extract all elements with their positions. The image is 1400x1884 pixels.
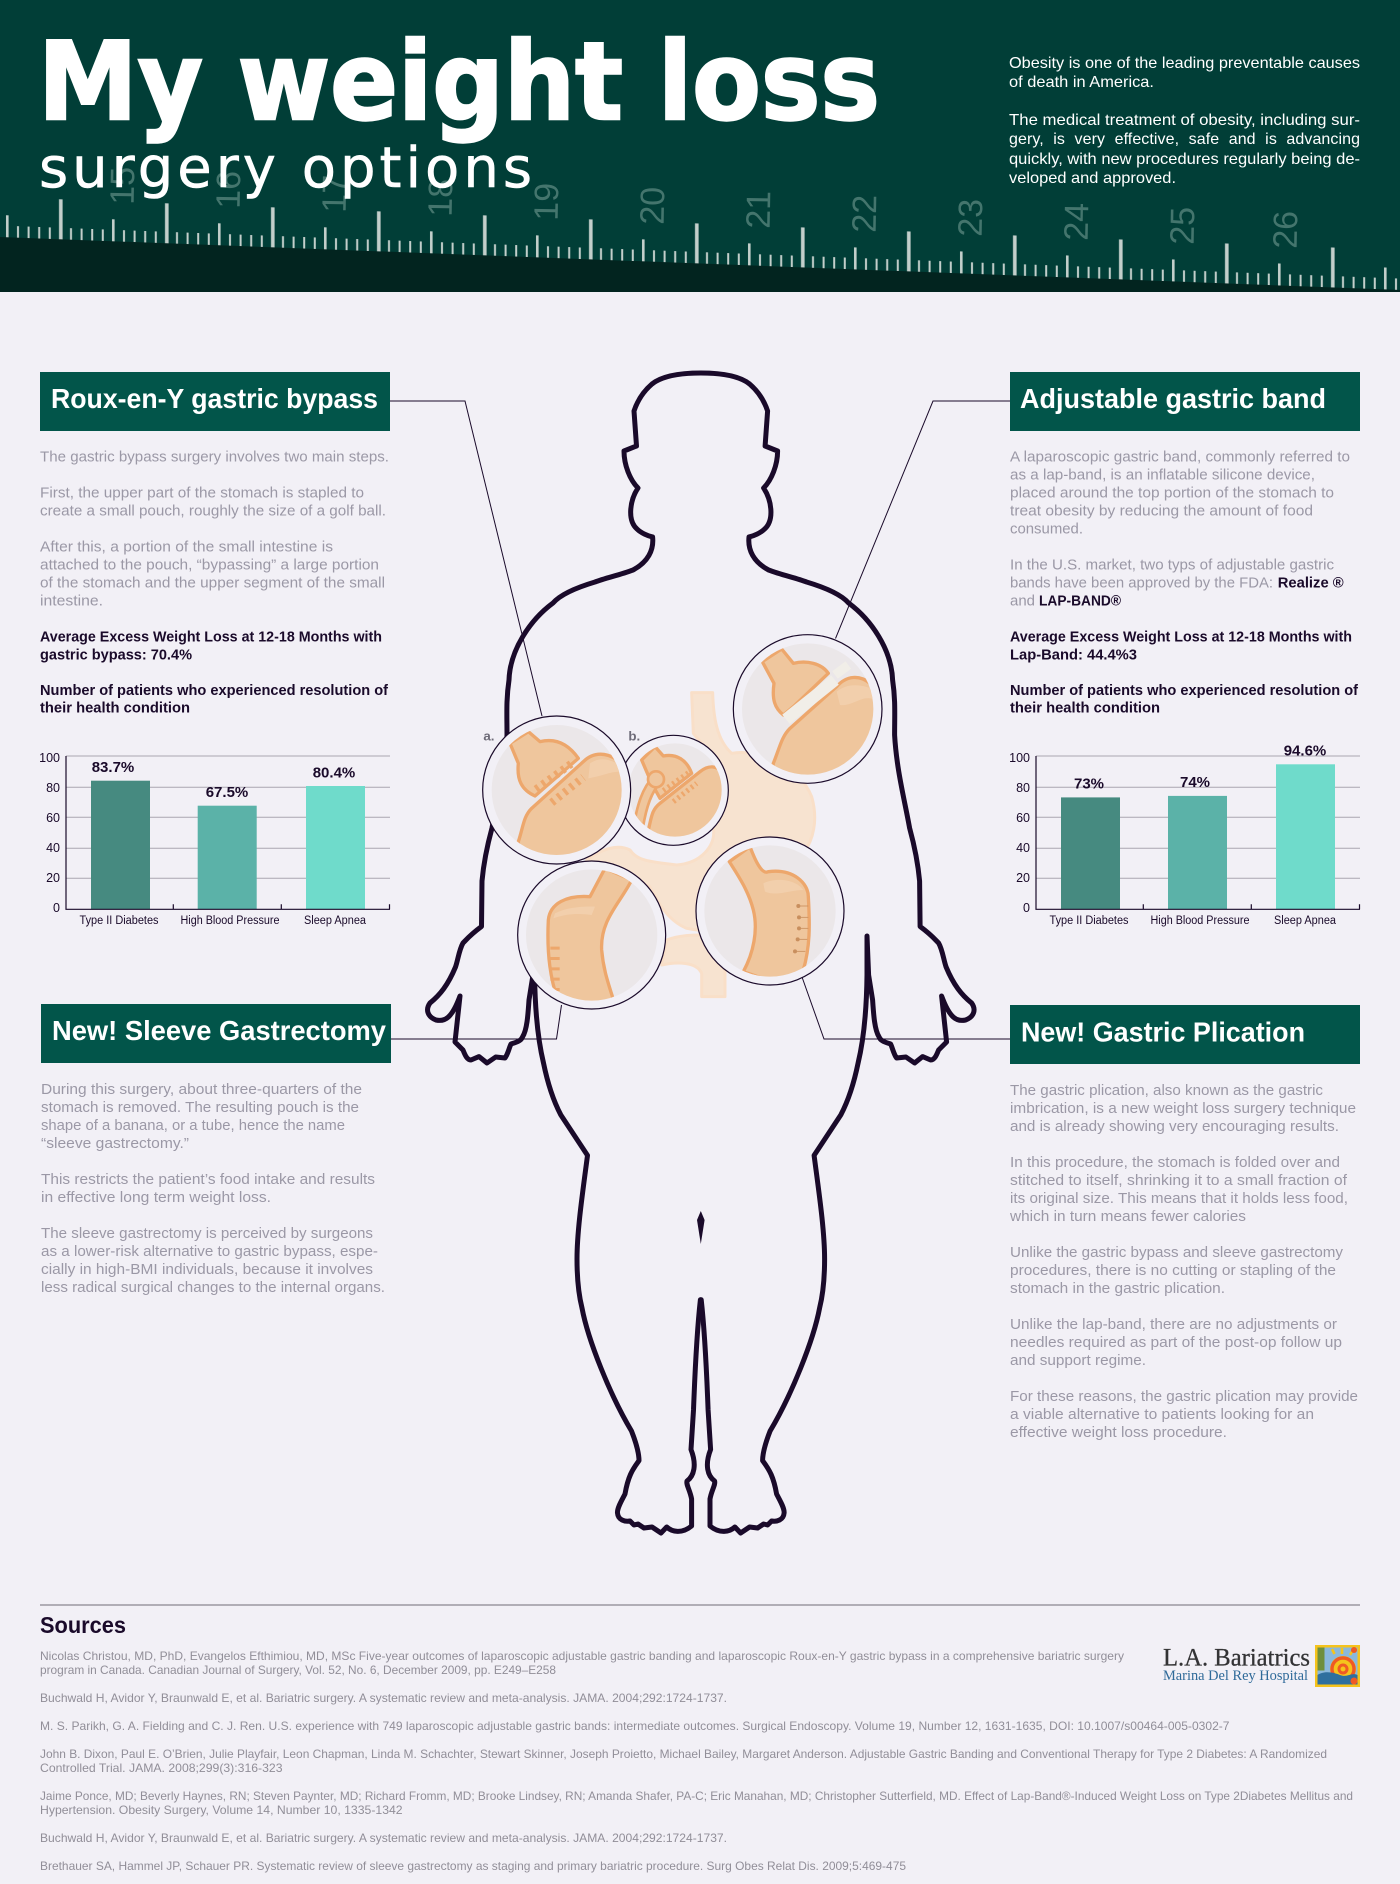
heading: plication xyxy=(1010,1005,1360,1064)
text: band stats: Average Excess Weight Loss at 12-18 Months with xyxy=(1010,629,1352,646)
text: bypass description: create a small pouch, roughly the size of a golf ball. xyxy=(40,503,386,520)
text: bypass stats: gastric bypass: 70.4% xyxy=(40,647,192,664)
text: plication description xyxy=(1009,1082,1358,1441)
bar chart: bypass: 80.4% xyxy=(313,765,355,782)
text: plication description: Unlike the gastric bypass and sleeve gastrectomy xyxy=(1010,1244,1344,1261)
text: band description: LAP-BAND® xyxy=(1039,593,1121,610)
ruler numbers: 17 xyxy=(316,175,354,213)
text: plication description: stomach in the gastric plication. xyxy=(1010,1280,1225,1297)
intro text: Obesity is one of the leading preventable causes xyxy=(1009,55,1360,72)
heading: band xyxy=(1010,372,1360,431)
background stomach xyxy=(587,693,815,997)
text: sleeve description: as a lower-risk alternative to gastric bypass, espe- xyxy=(41,1243,378,1260)
text: plication description: needles required as part of the post-op follow up xyxy=(1010,1334,1342,1351)
text: source list xyxy=(40,1649,1353,1873)
ruler numbers: 21 xyxy=(740,191,778,229)
text: plication description: a viable alternative to patients looking for an xyxy=(1010,1406,1314,1423)
text: band description xyxy=(1010,449,1350,610)
text: band description: as a lap-band, is an inflatable silicone device, xyxy=(1010,467,1315,484)
bar chart: bypass: Sleep Apnea xyxy=(304,915,367,927)
ruler numbers: 25 xyxy=(1164,207,1202,245)
text: plication description: imbrication, is a new weight loss surgery technique xyxy=(1010,1100,1356,1117)
text: source list: Buchwald H, Avidor Y, Braunwald E, et al. Bariatric surgery. A systematic review and meta-analysis. JAMA. 2004;292:1724-1737. xyxy=(40,1831,727,1845)
text: plication description: effective weight loss procedure. xyxy=(1010,1424,1227,1441)
text: sleeve description: During this surgery, about three-quarters of the xyxy=(41,1081,362,1098)
heading: sleeve: New! Sleeve Gastrectomy xyxy=(52,1015,386,1046)
icon: sun logo xyxy=(1315,1645,1360,1687)
text: band description: consumed. xyxy=(1010,521,1083,538)
heading: plication: New! Gastric Plication xyxy=(1021,1017,1305,1048)
logo: L.A. Bariatrics: L.A. Bariatrics xyxy=(1163,1645,1310,1672)
intro text: The medical treatment of obesity, including sur- xyxy=(1009,112,1360,129)
text: source list: Buchwald H, Avidor Y, Braunwald E, et al. Bariatric surgery. A systematic review and meta-analysis. JAMA. 2004;292:1724-1737. xyxy=(40,1691,727,1705)
text: bypass stats: Average Excess Weight Loss at 12-18 Months with xyxy=(40,629,382,646)
ruler numbers: 24 xyxy=(1058,203,1096,241)
text: band description: treat obesity by reducing the amount of food xyxy=(1010,503,1313,520)
text: plication description: For these reasons, the gastric plication may provide xyxy=(1010,1388,1358,1405)
text: band description: bands have been approved by the FDA: xyxy=(1010,575,1273,592)
heading: bypass xyxy=(40,372,390,431)
label a: a. xyxy=(483,729,494,744)
text: plication description: stitched to itself, shrinking it to a small fraction of xyxy=(1010,1172,1348,1189)
heading: sources: Sources xyxy=(40,1612,126,1638)
bar chart: bypass: 83.7% xyxy=(92,759,134,776)
subtitle: surgery options xyxy=(39,136,532,201)
bar chart: bypass: 60 xyxy=(46,811,60,825)
bar chart: band: 100 xyxy=(1009,751,1030,765)
text: bypass description: After this, a portion of the small intestine is xyxy=(40,539,333,556)
text: sleeve description: shape of a banana, or a tube, hence the name xyxy=(41,1117,345,1134)
ruler numbers: 20 xyxy=(634,187,672,225)
text: plication description: procedures, there is no cutting or stapling of the xyxy=(1010,1262,1336,1279)
bar chart: band: Sleep Apnea xyxy=(1274,915,1337,927)
ruler numbers xyxy=(104,167,1305,249)
bar chart: band: 0 xyxy=(1023,901,1030,915)
bar chart: band xyxy=(1009,742,1360,927)
ruler numbers: 18 xyxy=(422,179,460,217)
text: plication description: Unlike the lap-band, there are no adjustments or xyxy=(1010,1316,1337,1333)
circle: gastric plication xyxy=(696,837,844,985)
text: source list: Nicolas Christou, MD, PhD, Evangelos Efthimiou, MD, MSc Five-year outcomes of laparoscopic adjustable gastric banding and laparoscopic Roux-en-Y gastric bypass in a comprehensive bariatric surgery xyxy=(40,1649,1124,1663)
bar chart: bypass: 100 xyxy=(39,751,60,765)
heading: sleeve xyxy=(41,1004,391,1063)
bar chart: bypass: High Blood Pressure xyxy=(180,915,280,927)
ruler ticks xyxy=(0,190,1400,292)
bar chart: band: 73% xyxy=(1074,776,1104,792)
text: sleeve description: This restricts the patient’s food intake and results xyxy=(41,1171,375,1188)
text: plication description: its original size. This means that it holds less food, xyxy=(1010,1190,1348,1207)
text: band description: A laparoscopic gastric band, commonly referred to xyxy=(1010,449,1350,466)
bar chart: band: 60 xyxy=(1016,811,1030,825)
ruler numbers: 22 xyxy=(846,195,884,233)
ruler numbers: 26 xyxy=(1267,211,1305,249)
text: sleeve description: less radical surgical changes to the internal organs. xyxy=(41,1279,385,1296)
text: plication description: and is already showing very encouraging results. xyxy=(1010,1118,1339,1135)
circle b: gastric bypass step b xyxy=(626,734,729,846)
leader lines xyxy=(390,401,1010,1039)
circle a: gastric bypass step a xyxy=(482,715,632,865)
intro text: of death in America. xyxy=(1009,74,1154,91)
text: sleeve description: “sleeve gastrectomy.” xyxy=(41,1135,189,1152)
text: band stats: their health condition xyxy=(1010,700,1160,717)
text: bypass stats: their health condition xyxy=(40,700,190,717)
text: plication description: The gastric plication, also known as the gastric xyxy=(1010,1082,1323,1099)
text: bypass description: of the stomach and the upper segment of the small xyxy=(40,575,385,592)
ruler numbers: 16 xyxy=(210,171,248,209)
text: sleeve description: cially in high-BMI individuals, because it involves xyxy=(41,1261,373,1278)
bar chart: bypass: 80 xyxy=(46,781,60,795)
bar chart: band: 80 xyxy=(1016,781,1030,795)
ruler shadow wedge xyxy=(0,237,1400,292)
panel: Roux-en-Y gastric bypass xyxy=(39,372,390,927)
text: bypass stats xyxy=(40,629,389,717)
text: plication description: which in turn means fewer calories xyxy=(1009,1208,1246,1225)
panel: Adjustable gastric band xyxy=(1009,372,1360,927)
heading: bypass: Roux-en-Y gastric bypass xyxy=(51,383,378,414)
text: sleeve description: stomach is removed. The resulting pouch is the xyxy=(41,1099,359,1116)
bar chart: bypass: 67.5% xyxy=(206,784,248,801)
bar chart: band: 20 xyxy=(1016,871,1030,885)
text: bypass description: attached to the pouch, “bypassing” a large portion xyxy=(40,557,379,574)
text: source list: Hypertension. Obesity Surgery, Volume 14, Number 10, 1335-1342 xyxy=(40,1803,403,1817)
text: source list: program in Canada. Canadian Journal of Surgery, Vol. 52, No. 6, December 2009, pp. E249–E258 xyxy=(40,1663,556,1677)
text: source list: Jaime Ponce, MD; Beverly Haynes, RN; Steven Paynter, MD; Richard Fromm, MD; Brooke Lindsey, RN; Amanda Shafer, PA-C; Eric Manahan, MD; Christopher Sutterfield, MD. Effect of Lap-Band®-Induced Weight Loss on Type 2Diabetes Mellitus and xyxy=(40,1789,1353,1803)
text: sleeve description: The sleeve gastrectomy is perceived by surgeons xyxy=(41,1225,373,1242)
heading: band: Adjustable gastric band xyxy=(1020,383,1326,414)
text: sleeve description xyxy=(41,1081,385,1296)
bar chart: band: High Blood Pressure xyxy=(1150,915,1250,927)
panel: Sleeve Gastrectomy xyxy=(41,1004,391,1296)
bar chart: band: 94.6% xyxy=(1284,742,1326,760)
bar chart: bypass: 40 xyxy=(46,841,60,855)
logo: L.A. Bariatrics xyxy=(1163,1645,1360,1687)
text: plication description: and support regime. xyxy=(1010,1352,1146,1369)
text: band description: Realize ® xyxy=(1278,575,1344,592)
bar chart: band: Type II Diabetes xyxy=(1050,915,1129,927)
ruler numbers: 15 xyxy=(104,167,142,205)
bar chart: bypass: 0 xyxy=(53,901,60,915)
text: band description: placed around the top portion of the stomach to xyxy=(1010,485,1334,502)
text: band description: In the U.S. market, two typs of adjustable gastric xyxy=(1010,557,1335,574)
text: band stats xyxy=(1010,629,1359,717)
bar chart: band: 74% xyxy=(1180,774,1210,791)
bar chart: band: 40 xyxy=(1016,841,1030,855)
header banner xyxy=(0,0,1400,292)
intro text: veloped and approved. xyxy=(1009,170,1176,187)
text: bypass description: First, the upper part of the stomach is stapled to xyxy=(40,485,364,502)
bar chart: bypass: Type II Diabetes xyxy=(80,915,159,927)
circle: adjustable band xyxy=(732,634,883,784)
bar chart: bypass xyxy=(39,751,390,927)
text: source list: M. S. Parikh, G. A. Fielding and C. J. Ren. U.S. experience with 749 laparoscopic adjustable gastric bands: intermediate outcomes. Surgical Endoscopy. Volume 19, Number 12, 1631-1635, DOI: 10.1007/s00464-005-0302-7 xyxy=(40,1719,1230,1733)
intro text: gery, is very effective, safe and is advancing xyxy=(1009,131,1360,148)
text: bypass description xyxy=(40,449,389,610)
logo: L.A. Bariatrics: Marina Del Rey Hospital xyxy=(1163,1668,1308,1684)
ruler numbers: 19 xyxy=(528,183,566,221)
circle: sleeve gastrectomy xyxy=(518,861,666,1009)
text: bypass stats: Number of patients who experienced resolution of xyxy=(40,682,389,699)
body outline figure xyxy=(428,373,974,1533)
text: bypass description: The gastric bypass surgery involves two main steps. xyxy=(40,449,389,466)
text: bypass description: intestine. xyxy=(40,593,103,610)
text: band description: and xyxy=(1010,593,1035,610)
text: plication description: In this procedure, the stomach is folded over and xyxy=(1010,1154,1340,1171)
text: band stats: Number of patients who experienced resolution of xyxy=(1010,682,1359,699)
text: source list: Controlled Trial. JAMA. 2008;299(3):316-323 xyxy=(40,1761,283,1775)
intro text: quickly, with new procedures regularly being de- xyxy=(1009,151,1360,168)
text: source list: Brethauer SA, Hammel JP, Schauer PR. Systematic review of sleeve gastrectomy as staging and primary bariatric procedure. Surg Obes Relat Dis. 2009;5:469-475 xyxy=(40,1859,906,1873)
text: sleeve description: in effective long term weight loss. xyxy=(41,1189,271,1206)
panel: Gastric Plication xyxy=(1009,1005,1360,1441)
title: My weight loss xyxy=(38,20,880,145)
text: source list: John B. Dixon, Paul E. O’Brien, Julie Playfair, Leon Chapman, Linda M. Schachter, Stewart Skinner, Joseph Proietto, Michael Bailey, Margaret Anderson. Adjustable Gastric Banding and Conventional Therapy for Type 2 Diabetes: A Randomized xyxy=(40,1747,1327,1761)
panel: sources xyxy=(40,1605,1360,1873)
ruler numbers: 23 xyxy=(952,199,990,237)
organ diagrams xyxy=(483,635,907,1009)
label b: b. xyxy=(628,729,640,744)
text: band stats: Lap-Band: 44.4%3 xyxy=(1010,647,1137,664)
intro text xyxy=(1009,55,1360,187)
bar chart: bypass: 20 xyxy=(46,871,60,885)
